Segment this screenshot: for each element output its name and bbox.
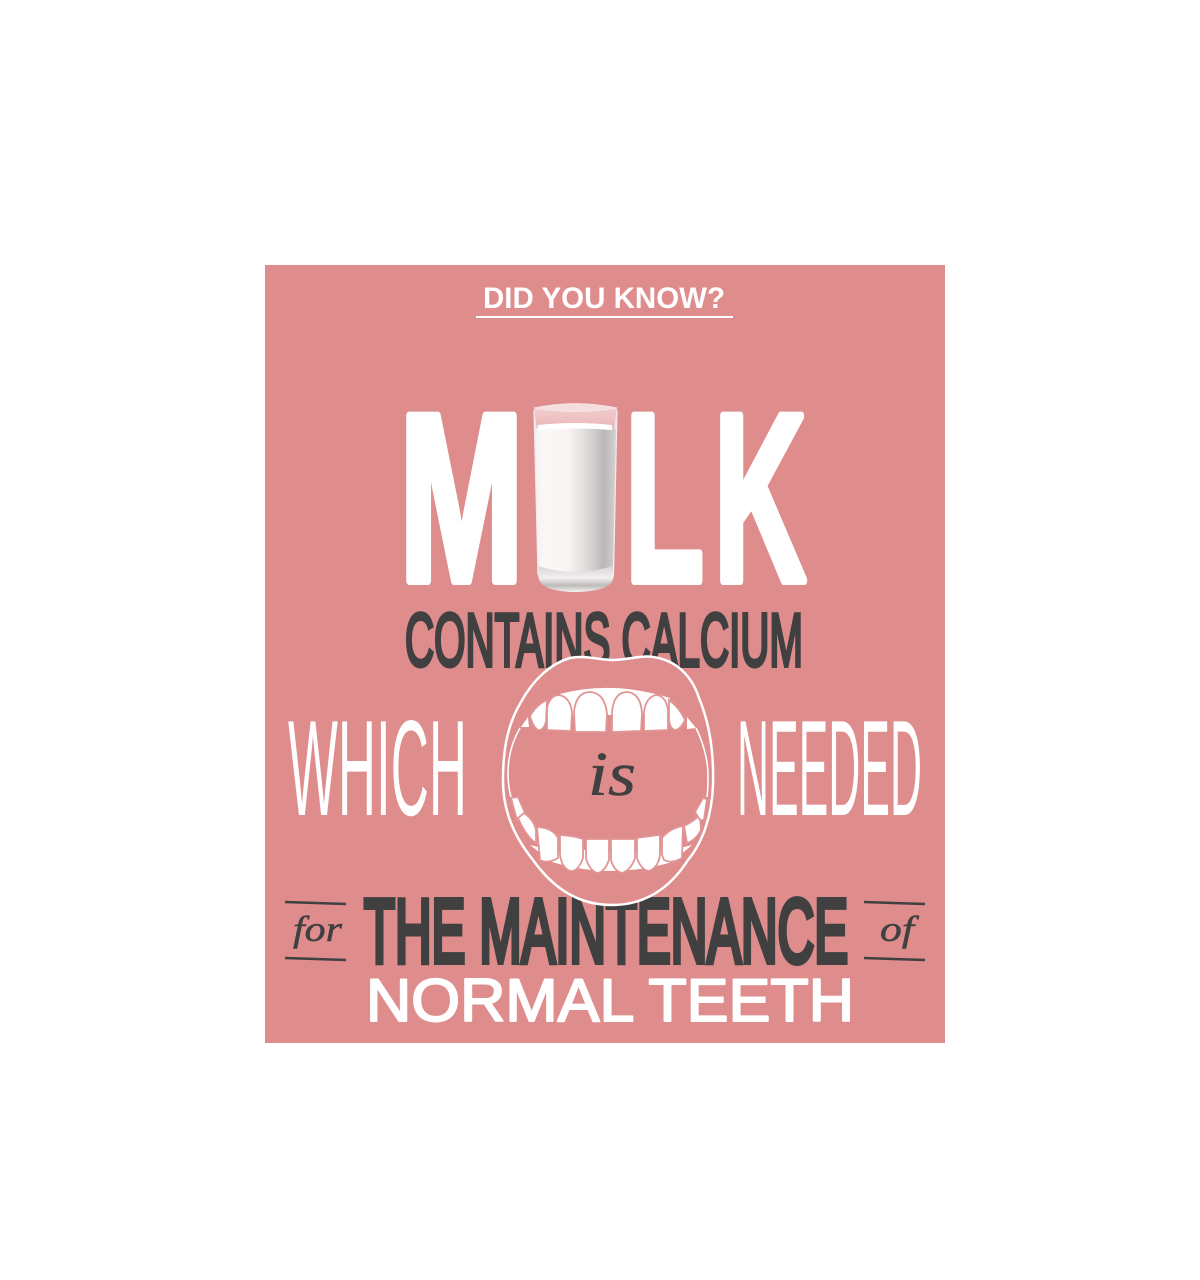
title: milk: L (625, 364, 704, 632)
title: milk (399, 364, 806, 632)
illustration: open mouth (503, 657, 713, 905)
heading: did you know: DID YOU KNOW? (483, 282, 725, 315)
mouth outline (503, 657, 713, 905)
text: normal teeth: NORMAL TEETH (366, 967, 854, 1034)
decoration: of: of (880, 909, 920, 949)
word: is: is (588, 741, 636, 809)
title: milk: K (714, 364, 806, 632)
icon: glass of milk (534, 403, 617, 592)
text: contains calcium: CONTAINS CALCIUM (405, 598, 803, 682)
decoration: for: for (293, 909, 343, 949)
upper small teeth (521, 717, 696, 729)
panel: pink background (265, 265, 945, 1043)
upper teeth (530, 692, 685, 732)
inner lip lines (508, 728, 708, 797)
decoration: for (285, 902, 346, 960)
decoration: of (864, 902, 925, 960)
title: milk: I (555, 364, 595, 632)
title: milk: M (399, 364, 524, 632)
lower teeth (511, 797, 707, 873)
lower gum (530, 845, 692, 871)
text: the maintenance: THE MAINTENANCE (364, 882, 848, 982)
upper gum (560, 688, 670, 715)
infographic canvas: WHICH (288, 692, 467, 844)
